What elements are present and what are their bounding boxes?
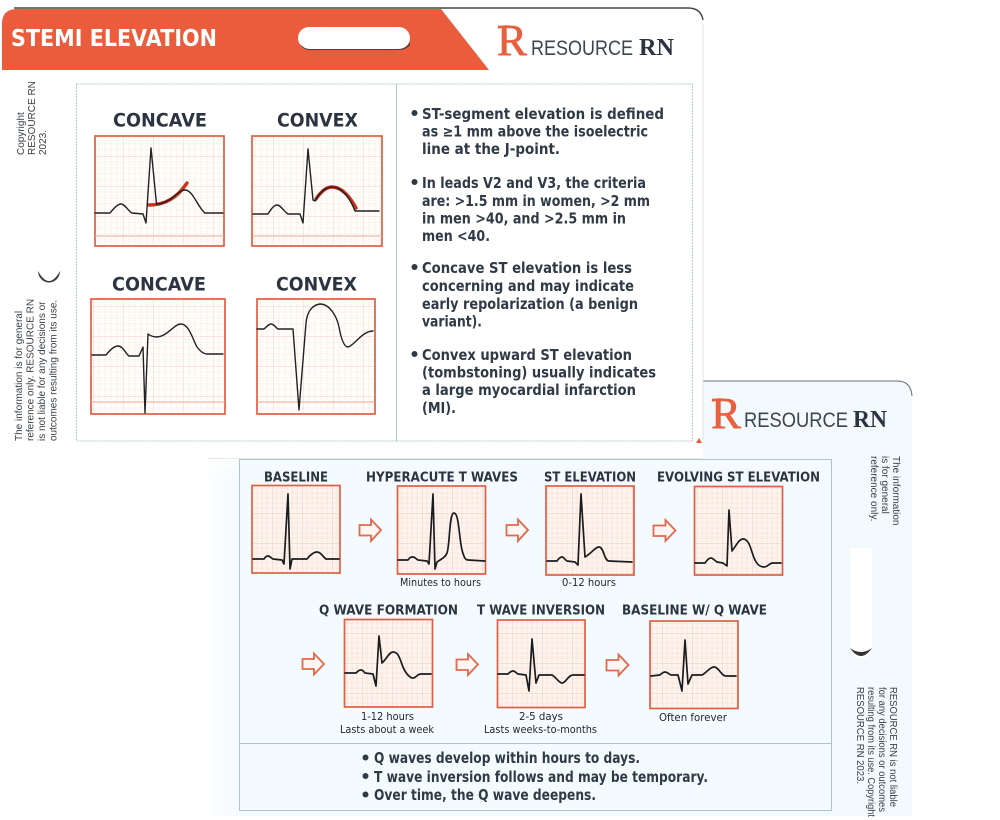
logo: top: RESOURCE (531, 37, 633, 60)
panel: ECG evolution (240, 460, 832, 810)
heading: T wave inversion: T WAVE INVERSION (477, 602, 605, 618)
bullet 4: (tombstoning) usually indicates (422, 364, 656, 382)
arrow 6 (606, 654, 628, 676)
logo: bottom: R (711, 389, 742, 438)
arrow 2 (506, 520, 528, 541)
bullet 3: Concave ST elevation is less (422, 259, 632, 277)
ecg: ST elevation (546, 486, 634, 575)
copyright note: RESOURCE RN (27, 81, 38, 155)
disclaimer: bottom card lower: RESOURCE RN 2023. (854, 687, 865, 784)
bullet 2: in men >40, and >2.5 mm in (422, 210, 626, 228)
logo: bottom: RN (853, 407, 888, 433)
caption: often forever: Often forever (659, 711, 727, 724)
bullet 2: are: >1.5 mm in women, >2 mm (422, 192, 650, 210)
ecg: concave 1 (95, 136, 224, 246)
bullet 4: a large myocardial infarction (422, 381, 636, 399)
bottom card slot (850, 548, 872, 658)
caption: minutes to hours: Minutes to hours (400, 576, 481, 589)
top card (2, 8, 703, 458)
heading: Q wave formation: Q WAVE FORMATION (319, 602, 458, 618)
bullet 3: concerning and may indicate (422, 277, 634, 295)
disclaimer: bottom card top: The information (890, 456, 901, 525)
logo: bottom: RESOURCE (744, 409, 848, 432)
caption: 0-12 hours: 0-12 hours (562, 576, 616, 589)
disclaimer: top card: outcomes resulting from its use. (48, 300, 60, 441)
arrow 5 (456, 654, 478, 675)
left edge slot (38, 271, 60, 282)
panel: STEMI morphology (76, 84, 692, 441)
heading: evolving ST elevation: EVOLVING ST ELEVATION (657, 470, 820, 486)
bullet 3: variant). (422, 312, 482, 330)
ecg: baseline with Q wave (650, 621, 738, 708)
text block: Q wave notes: T wave inversion follows and may be temporary. (374, 768, 708, 786)
bullet 1 (412, 105, 664, 158)
ecg: Q wave formation (344, 620, 432, 707)
bullet 1: ST-segment elevation is defined (422, 105, 664, 123)
caption: 2-5 days: 2-5 days (519, 710, 563, 723)
disclaimer: top card: The information is for general (14, 311, 25, 441)
heading: convex 1: CONVEX (277, 110, 358, 132)
bullet 4: Convex upward ST elevation (422, 346, 632, 364)
text block: Q wave notes: Over time, the Q wave deepens. (374, 786, 596, 804)
bullet 4 (412, 346, 656, 417)
bottom card slot shadow (850, 648, 872, 656)
ecg: convex 1 (252, 136, 382, 246)
heading: concave 1: CONCAVE (113, 110, 207, 132)
caption: lasts about a week: Lasts about a week (340, 723, 435, 736)
arrow 1 (360, 520, 381, 541)
logo: top: R (497, 16, 528, 65)
heading: concave 2: CONCAVE (112, 274, 206, 296)
small orange mark (696, 438, 702, 443)
logo: top: RN (639, 35, 675, 61)
caption: 1-12 hours: 1-12 hours (361, 710, 414, 723)
text block: Q wave notes (362, 749, 708, 804)
copyright note: Copyright (16, 112, 27, 155)
arrow 4 (302, 654, 324, 674)
heading: baseline: BASELINE (264, 470, 328, 486)
bullet 2: men <40. (422, 227, 490, 245)
bullet 3 (412, 259, 638, 330)
header slot (298, 27, 410, 50)
disclaimer: top card: reference only. RESOURCE RN (26, 299, 36, 441)
ecg: convex 2 (257, 299, 375, 414)
heading: ST elevation: ST ELEVATION (544, 470, 636, 486)
bullet 3: early repolarization (a benign (422, 295, 638, 313)
ecg: evolving ST elevation (694, 486, 782, 575)
bullet 2 (412, 174, 650, 245)
ecg: hyperacute T waves (398, 486, 486, 574)
heading: convex 2: CONVEX (276, 274, 357, 296)
disclaimer: bottom card top: reference only. (868, 456, 879, 521)
title: STEMI ELEVATION (11, 26, 217, 52)
orange header banner (2, 9, 489, 70)
disclaimer: bottom card lower: for any decisions or outcomes (876, 687, 887, 812)
copyright note: 2023. (38, 130, 49, 155)
logo: top (497, 16, 675, 65)
ecg: concave 2 (91, 299, 225, 414)
disclaimer: bottom card lower: RESOURCE RN is not liable (887, 687, 898, 807)
bottom card (200, 381, 912, 816)
heading: baseline with Q wave: BASELINE W/ Q WAVE (622, 602, 767, 618)
caption: lasts weeks-to-months: Lasts weeks-to-months (484, 723, 597, 736)
disclaimer: bottom card top: is for general (879, 456, 890, 514)
ecg: T wave inversion (498, 620, 585, 708)
heading: hyperacute T waves: HYPERACUTE T WAVES (366, 470, 518, 486)
text block: Q wave notes: Q waves develop within hours to days. (374, 749, 640, 767)
text block: ST elevation notes (412, 105, 664, 417)
bullet 2: In leads V2 and V3, the criteria (422, 174, 646, 192)
ecg: baseline (252, 486, 340, 573)
bullet 1: line at the J-point. (422, 140, 560, 158)
arrow 3 (654, 520, 676, 541)
bullet 1: as ≥1 mm above the isoelectric (422, 122, 648, 140)
bullet 4: (MI). (422, 399, 456, 417)
logo: bottom (711, 389, 888, 438)
disclaimer: top card: is not liable for any decisions or (37, 301, 48, 441)
